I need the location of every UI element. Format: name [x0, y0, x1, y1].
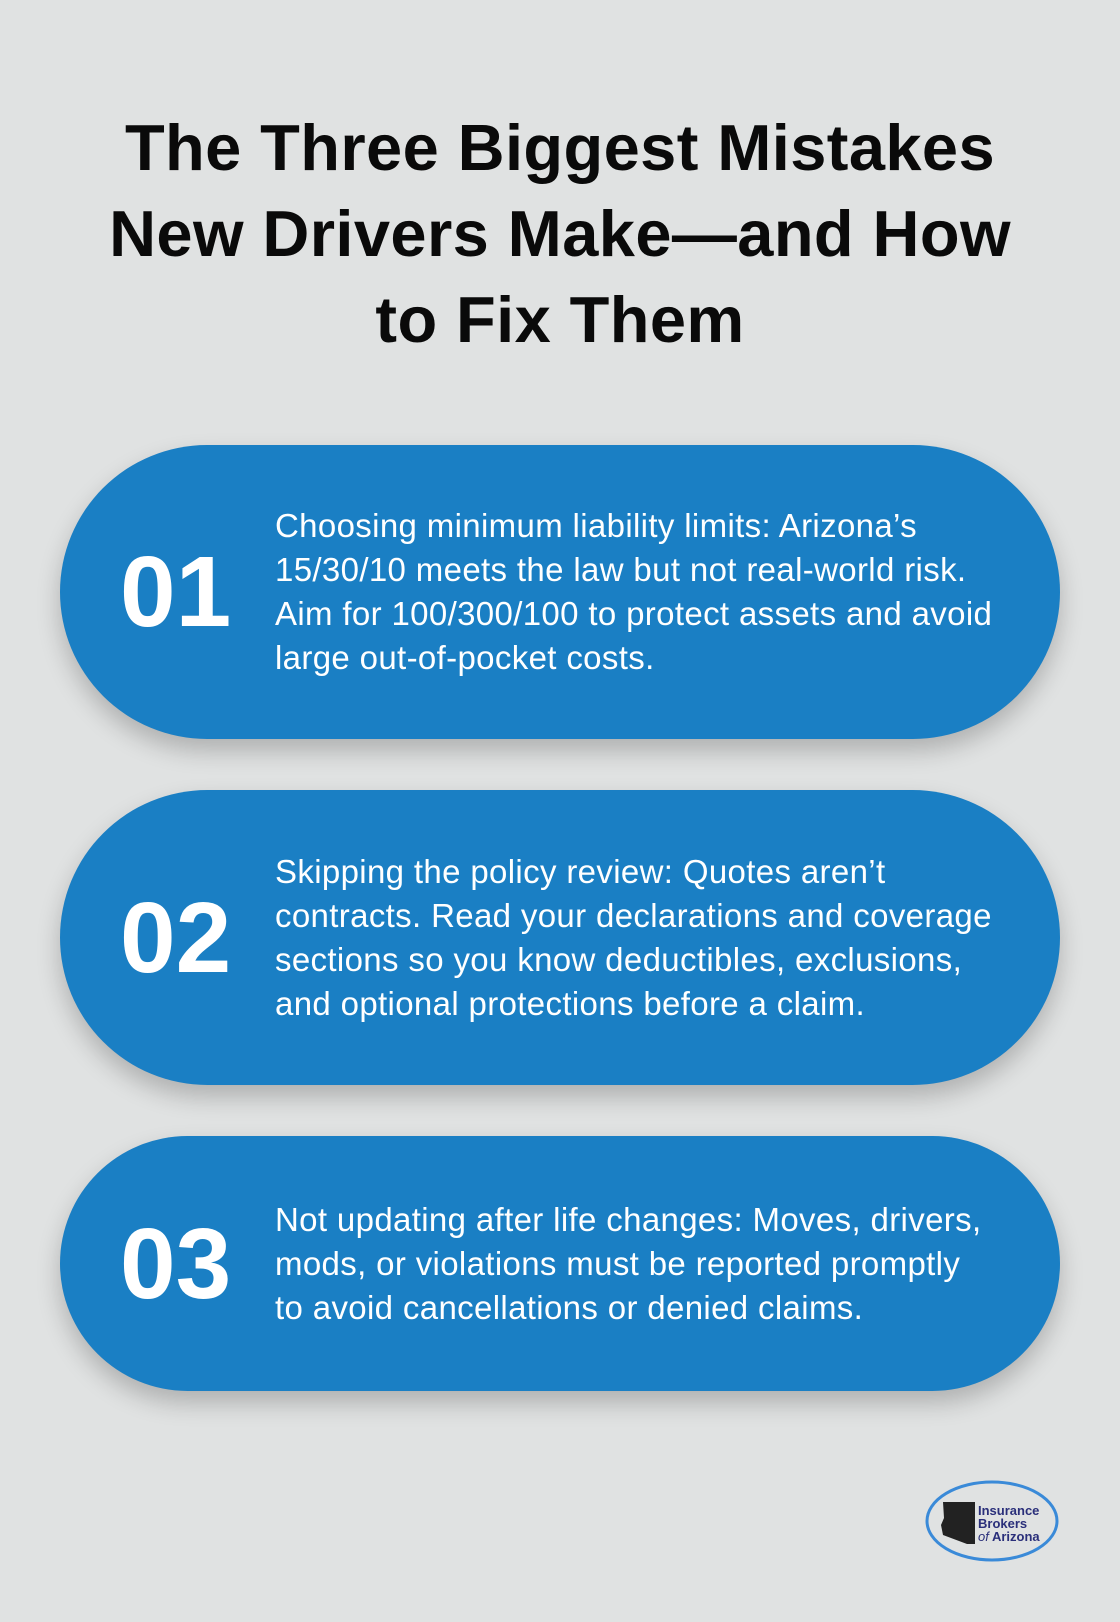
number 03: 03 [120, 1208, 231, 1320]
text 2: Skipping the policy review: Quotes aren’t [275, 852, 886, 890]
text 1: Choosing minimum liability limits: Arizona’s [275, 507, 917, 544]
number 01: 01 [120, 536, 231, 648]
panel: mistake 2 [60, 790, 1060, 1085]
text 3 [275, 1200, 981, 1326]
text 3: to avoid cancellations or denied claims. [275, 1288, 863, 1326]
text 3: Not updating after life changes: Moves, drivers, [275, 1200, 981, 1238]
title: The Three Biggest Mistakes [125, 111, 995, 184]
title [109, 111, 1011, 356]
logo [926, 1480, 1058, 1562]
text 1: large out-of-pocket costs. [275, 639, 655, 676]
text 2: sections so you know deductibles, exclusions, [275, 940, 962, 978]
text 3: mods, or violations must be reported promptly [275, 1244, 960, 1282]
title: to Fix Them [375, 283, 745, 356]
text 2: contracts. Read your declarations and coverage [275, 896, 992, 934]
text 1: Aim for 100/300/100 to protect assets and avoid [275, 595, 992, 632]
text 2: and optional protections before a claim. [275, 984, 865, 1022]
panel: mistake 3 [60, 1136, 1060, 1391]
logo: of Arizona [978, 1529, 1040, 1544]
panel: mistake 1 [60, 445, 1060, 739]
text 2 [275, 852, 992, 1022]
title: New Drivers Make—and How [109, 197, 1011, 270]
text 1 [275, 507, 992, 676]
text 1: 15/30/10 meets the law but not real-world risk. [275, 551, 966, 588]
number 02: 02 [120, 882, 231, 994]
logo: Insurance [978, 1503, 1039, 1518]
logo: Brokers [978, 1516, 1027, 1531]
